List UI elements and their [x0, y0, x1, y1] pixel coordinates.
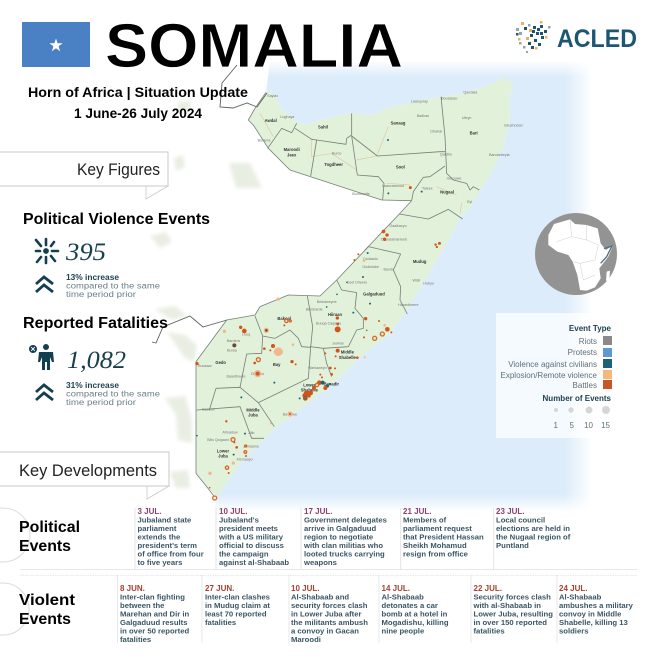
subtitle: Horn of Africa | Situation Update: [28, 85, 249, 100]
event: 3 Jul: president's term: [138, 541, 197, 550]
event: 24 Jul: Shabelle, killing 13: [559, 618, 628, 627]
event: 22 Jul: 22 JUL.: [474, 584, 502, 593]
event: 10 Jul: in Lower Juba after: [291, 610, 361, 618]
event: 3 Jul: parliament: [138, 524, 177, 533]
southern regions: Cadaado: [363, 257, 378, 261]
northern regions: Garoowe: [447, 176, 461, 180]
event: 10 Jul: official to discuss: [219, 541, 284, 550]
subtitle: 1 June-26 July 2024: [74, 106, 202, 121]
heading box: Key Figures: Key Figures: [77, 160, 160, 179]
northern regions: Iskushuban: [504, 123, 523, 127]
section label: Events: [19, 611, 71, 628]
southern regions: Mudug: [413, 259, 427, 264]
southern regions: Hiiraan: [328, 312, 343, 317]
northern regions: Laasqoray: [411, 99, 428, 103]
key figure: reported fatalities: [23, 315, 168, 407]
northern regions: Qandala: [463, 90, 478, 94]
southern regions: Baardheere: [226, 374, 246, 378]
event: 10 Jul: the campaign: [219, 549, 269, 558]
event: 8 Jun: fatalities: [120, 635, 151, 644]
event: 24 Jul: soldiers: [559, 627, 588, 636]
icon: person with x: [29, 344, 54, 370]
ACLED logo: [516, 21, 637, 53]
event: 27 Jun: in Mudug claim at: [205, 601, 270, 610]
southern regions: Wisil: [412, 279, 420, 283]
southern regions: Baxdo: [383, 268, 394, 272]
icon: event burst: [36, 239, 58, 263]
event: 8 Jun: [120, 584, 190, 644]
event: 14 Jul: Al-Shabaab: [382, 592, 424, 602]
northern regions: Bandarbeyla: [489, 153, 511, 157]
flag of Somalia: [22, 22, 90, 67]
southern regions: Hobyo: [423, 281, 434, 285]
event: 10 Jul: against al-Shabaab: [219, 558, 289, 567]
event: 24 Jul: ambushes a military: [559, 601, 634, 610]
southern regions: Juba: [248, 413, 259, 418]
event: 17 Jul: with clan militias who: [303, 541, 383, 550]
map of Somalia: [150, 60, 604, 512]
event: 14 Jul: 14 JUL.: [382, 584, 410, 593]
southern regions: Bardera: [227, 339, 241, 343]
southern regions: Jowhar: [332, 342, 345, 346]
event: 10 Jul: Maroodi: [291, 635, 321, 644]
event: 8 Jun: Marehan and Dir in: [120, 610, 190, 618]
legend: number of events: 15: [601, 421, 611, 430]
event: 17 Jul: region to negotiate: [304, 532, 374, 541]
event: 24 Jul: Al-Shabaab: [559, 592, 602, 602]
northern regions: Eyl: [467, 200, 472, 204]
event: 10 Jul: the militants ambush: [291, 618, 368, 627]
icon: increase chevrons: [36, 385, 53, 400]
southern regions: Lower: [303, 382, 316, 387]
event: 3 Jul: extends the: [138, 532, 181, 541]
event: 24 Jul: 24 JUL.: [559, 584, 587, 593]
event: 22 Jul: in over 150 reported: [474, 618, 547, 627]
northern regions: Bari: [470, 130, 478, 135]
northern regions: Burco: [332, 151, 341, 155]
icon: increase chevrons: [36, 277, 53, 292]
northern regions: Boosaaso: [441, 96, 457, 100]
logo globe: [516, 21, 550, 53]
event: 10 Jul: Jubaland's: [219, 515, 259, 524]
event: 23 Jul: the Nugaal region of: [496, 532, 571, 541]
legend: number of events: [543, 394, 612, 430]
event: 8 Jun: Inter-clan fighting: [120, 592, 185, 602]
section label: [0, 583, 76, 635]
event: 23 Jul: Local council: [496, 515, 545, 524]
southern regions: Galgaduud: [363, 292, 385, 297]
event: 10 Jul: a convoy in Gacan: [291, 627, 359, 636]
event: 17 Jul: 17 JUL.: [304, 507, 332, 516]
section label: Political: [19, 519, 80, 536]
southern regions: Juba: [218, 454, 229, 459]
southern regions: Bilis Qoqaani: [207, 438, 229, 442]
value: 395: [65, 239, 106, 266]
event: 10 Jul: 10 JUL.: [219, 507, 247, 516]
event: 3 Jul: to five years: [138, 558, 182, 567]
northern regions: Togdheer: [324, 162, 343, 167]
event: 22 Jul: with al-Shabaab in: [472, 601, 541, 610]
heading: Reported Fatalities: [23, 315, 168, 332]
heading box: Key Developments: Key Developments: [19, 461, 157, 480]
northern regions: Nugaal: [440, 190, 454, 195]
event: 3 Jul: of office from four: [138, 549, 204, 558]
southern regions: Baraawe: [283, 412, 297, 416]
title: SOMALIA: [105, 12, 403, 81]
event: 17 Jul: weapons: [303, 558, 337, 567]
southern regions: Middle: [341, 350, 355, 355]
section label: Violent: [19, 592, 76, 609]
southern regions: Buraa: [227, 349, 238, 353]
event: 27 Jun: [205, 584, 270, 627]
southern regions: Gedo: [215, 360, 226, 365]
southern regions: Beledweyne: [317, 300, 337, 304]
southern regions: Bulobarde: [306, 307, 323, 311]
southern regions: Xudur: [273, 351, 284, 355]
event: 17 Jul: Government delegates: [304, 515, 387, 524]
event: 10 Jul: president meets: [219, 524, 278, 533]
change text: [66, 381, 161, 407]
event: 17 Jul: arrive in Galgaduud: [304, 524, 376, 533]
southern regions: Ceel Dheere: [347, 281, 367, 285]
event: 24 Jul: convoy in Middle: [559, 610, 622, 618]
event: 21 Jul: Members of: [403, 515, 447, 524]
event: 21 Jul: that President Hassan: [403, 532, 484, 541]
logo wordmark: ACLED: [557, 25, 637, 53]
subtitle: [28, 85, 249, 121]
event: 21 Jul: [403, 507, 484, 558]
event: 22 Jul: [472, 584, 553, 636]
southern regions: Wanlaweyn: [308, 366, 327, 370]
southern regions: Lower: [217, 448, 229, 453]
northern regions: Sool: [396, 165, 405, 170]
northern regions: Dhahar: [430, 130, 443, 134]
legend: event type: Protests: [568, 348, 597, 357]
northern regions: Maroodi: [284, 147, 300, 152]
southern regions: Buusaar: [198, 364, 213, 368]
southern regions: Harardheere: [398, 303, 419, 307]
change text: time period prior: [66, 398, 136, 407]
heading: Political Violence Events: [23, 211, 210, 228]
southern regions: Bakool: [277, 316, 291, 321]
heading box: Key Figures: [0, 152, 168, 199]
event: 10 Jul: [291, 584, 368, 644]
event: 21 Jul: parliament request: [403, 524, 472, 533]
southern regions: Diinsoor: [251, 372, 265, 376]
southern regions: Kismaayo: [237, 458, 253, 462]
event: 17 Jul: looted trucks carrying: [304, 549, 385, 558]
event: 21 Jul: 21 JUL.: [403, 507, 431, 516]
legend: event type: Battles: [573, 381, 597, 390]
event: 14 Jul: Mogadishu, killing: [382, 618, 449, 627]
Africa: [548, 219, 613, 291]
change text: [66, 273, 161, 299]
southern regions: [195, 230, 441, 500]
northern regions: Lughaya: [280, 115, 295, 119]
section: political events: [0, 507, 637, 570]
event: 23 Jul: elections are held in: [496, 524, 570, 533]
event: 3 Jul: Jubaland state: [138, 515, 192, 524]
event: 3 Jul: 3 JUL.: [138, 507, 162, 516]
northern regions: Qardho: [440, 152, 452, 156]
southern regions: Saacow: [202, 408, 215, 412]
northern regions: Badhan: [417, 114, 429, 118]
southern regions: Godinlabe: [362, 265, 379, 269]
northern regions: Saylac: [267, 94, 278, 98]
northern regions: Ufeyn: [462, 116, 471, 120]
northern regions: Buuhoodle: [352, 192, 370, 196]
southern regions: Bay: [273, 362, 281, 367]
northern regions: Sahil: [318, 125, 328, 130]
northern regions: Sanaag: [391, 120, 406, 125]
legend: [496, 313, 617, 438]
legend: number of events: Number of Events: [543, 394, 612, 403]
border: Djibouti and Ethiopia: [220, 65, 267, 108]
Somalia highlight: [601, 246, 612, 263]
event: 27 Jun: Inter-clan clashes: [205, 592, 270, 602]
ocean: [214, 62, 595, 512]
key figure: political violence events: [23, 211, 210, 299]
change text: compared to the same: [66, 282, 161, 290]
event: 21 Jul: Sheikh Mohamud: [403, 541, 467, 550]
section label: [0, 508, 80, 562]
northern regions: Gaalkacyo: [389, 224, 407, 228]
event: 27 Jun: 27 JUN.: [205, 584, 234, 593]
event: 17 Jul: [303, 507, 387, 567]
change text: time period prior: [66, 290, 136, 299]
legend: event type: Violence against civilians: [508, 360, 597, 369]
event: 8 Jun: Galgaduud results: [120, 618, 188, 627]
legend: number of events: 1: [554, 421, 559, 430]
northern regions: Jeex: [287, 152, 297, 157]
border: Kenya and Ethiopia: [152, 316, 227, 343]
legend: number of events: 10: [584, 421, 594, 430]
event: 14 Jul: detonates a car: [382, 601, 438, 610]
southern regions: Jamaame: [243, 444, 259, 448]
event: 10 Jul: security forces clash: [291, 601, 368, 610]
event: 27 Jun: fatalities: [205, 618, 236, 627]
event: 22 Jul: Security forces clash: [474, 592, 551, 602]
event: 23 Jul: 23 JUL.: [496, 507, 524, 516]
faint neighbouring land features: [150, 100, 262, 488]
event: 22 Jul: Lower Juba, resulting: [474, 610, 553, 618]
southern regions: Banadir: [324, 381, 339, 386]
event: 22 Jul: fatalities: [474, 627, 505, 636]
value: 1,082: [67, 347, 126, 374]
event: 14 Jul: [382, 584, 449, 636]
event: 8 Jun: in over 50 reported: [120, 627, 190, 636]
section: violent events: [0, 575, 637, 644]
event: 10 Jul: [218, 507, 289, 567]
northern regions: [248, 90, 523, 250]
event: 8 Jun: between the: [120, 601, 165, 610]
change text: compared to the same: [66, 390, 161, 398]
legend: number of events: 5: [570, 421, 575, 430]
heading box: Key Developments: [0, 452, 169, 499]
change text: 13% increase: [66, 273, 120, 282]
southern regions: Buuqa Caqable: [316, 321, 341, 325]
southern regions: Shabelle: [301, 388, 319, 393]
event: 10 Jul: with a US military: [218, 532, 284, 541]
southern regions: Luuq: [242, 333, 250, 337]
event: 21 Jul: resign from office: [403, 549, 469, 558]
section label: Events: [19, 538, 71, 555]
event: 3 Jul: [138, 507, 204, 567]
event: 10 Jul: 10 JUL.: [291, 584, 319, 593]
legend: event type: Explosion/Remote violence: [500, 371, 598, 380]
event: 14 Jul: nine people: [382, 627, 425, 636]
event: 8 Jun: 8 JUN.: [120, 584, 145, 593]
event: 24 Jul: [559, 584, 634, 636]
southern regions: Middle: [246, 407, 260, 412]
legend: event type: Event Type: [569, 324, 612, 333]
land: Somalia: [196, 77, 513, 497]
legend: event type: Riots: [579, 337, 597, 346]
northern regions: Awdal: [265, 118, 277, 123]
event: 10 Jul: Al-Shabaab and: [291, 592, 349, 602]
southern regions: Afmadow: [222, 431, 238, 435]
legend: event type: [500, 324, 612, 390]
northern regions: Taleex: [422, 186, 433, 190]
event: 14 Jul: bomb at a hotel in: [382, 610, 448, 618]
northern regions: Borama: [258, 139, 271, 143]
southern regions: Shabelle: [339, 355, 357, 360]
event: 27 Jun: least 70 reported: [205, 610, 267, 618]
southern regions: Jilib: [248, 431, 254, 435]
southern regions: Dhuusamarreeb: [381, 237, 407, 241]
event: 23 Jul: [496, 507, 571, 550]
northern regions: Laascaanood: [382, 184, 404, 188]
change text: 31% increase: [66, 381, 120, 390]
event: 23 Jul: Puntland: [496, 541, 529, 550]
locator globe: [535, 213, 617, 295]
